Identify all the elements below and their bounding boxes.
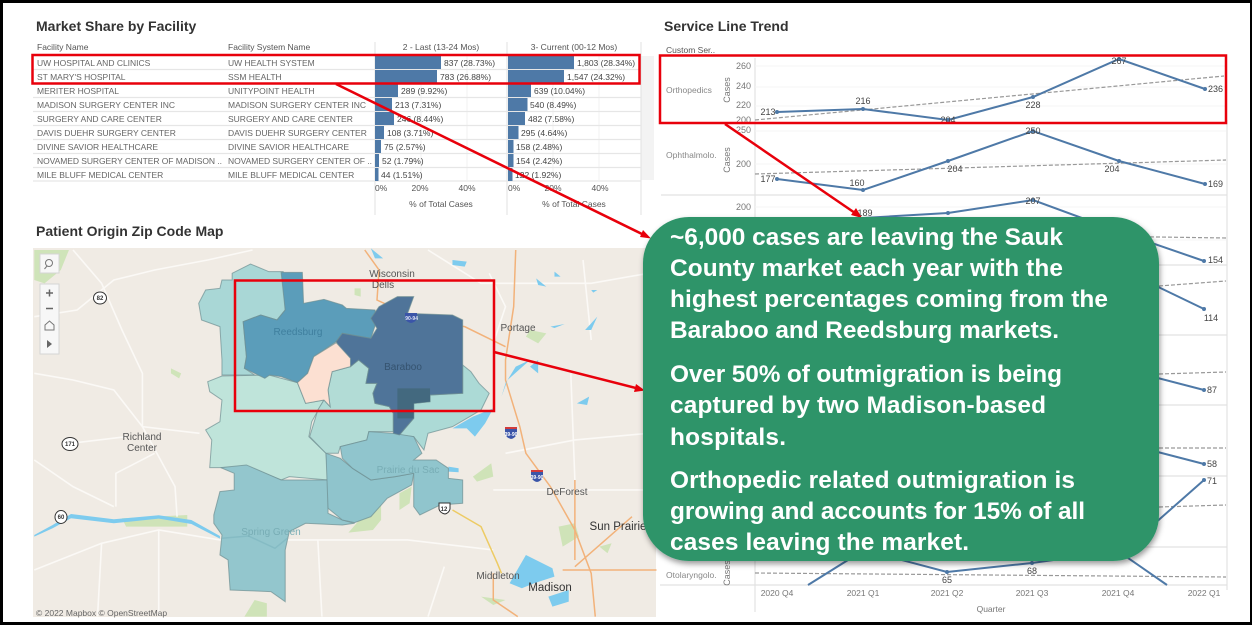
data labels: 58 <box>1207 459 1217 469</box>
icons: highway shields: 171 <box>65 442 76 448</box>
map labels: Portage <box>500 323 536 334</box>
row labels: Orthopedics <box>666 85 712 95</box>
data labels: 204 <box>947 164 963 174</box>
data points <box>775 57 1207 574</box>
y axes: 200 <box>736 115 751 125</box>
data labels: 71 <box>1207 476 1217 486</box>
data labels: 154 <box>1208 255 1223 265</box>
bar chart: current period: 295 (4.64%) <box>521 128 567 138</box>
facility names: ST MARY'S HOSPITAL <box>37 72 126 82</box>
heading: service line trend: Service Line Trend <box>664 18 788 34</box>
x axis: 2022 Q1 <box>1188 588 1221 598</box>
bar chart: last period: 52 (1.79%) <box>382 156 424 166</box>
icons: highway shields <box>55 292 544 524</box>
data labels: 250 <box>1025 126 1041 136</box>
facility systems: MADISON SURGERY CENTER INC <box>228 100 366 110</box>
facility names: DAVIS DUEHR SURGERY CENTER <box>37 128 176 138</box>
bar chart: current period: 1,547 (24.32%) <box>567 72 625 82</box>
callout text: second finding <box>670 361 1062 451</box>
callout text: first finding: ~6,000 cases are leaving the Sauk <box>670 224 1063 251</box>
axis labels <box>375 183 609 209</box>
data labels: 114 <box>1204 313 1218 323</box>
axis labels: 20% <box>411 183 429 193</box>
callout text: second finding: Over 50% of outmigration is being <box>670 361 1062 388</box>
data labels: 204 <box>1104 164 1120 174</box>
map labels: Sun Prairie <box>590 521 646 533</box>
facility names: MADISON SURGERY CENTER INC <box>37 100 175 110</box>
y axes: 250 <box>736 125 751 135</box>
facility systems: NOVAMED SURGERY CENTER OF .. <box>228 156 372 166</box>
map labels: DeForest <box>546 487 588 498</box>
arrow: facilities to callout <box>336 84 651 238</box>
panel: market share table <box>33 42 654 215</box>
map labels: Richland <box>123 432 161 443</box>
highlight: orthopedics trend <box>660 56 1226 123</box>
bar chart: last period: 213 (7.31%) <box>395 100 441 110</box>
heading: map: Patient Origin Zip Code Map <box>36 223 223 239</box>
column headers: Facility Name <box>37 42 89 52</box>
column headers <box>37 42 617 52</box>
bar chart: last period: 75 (2.57%) <box>384 142 426 152</box>
row labels: Otolaryngolo. <box>666 570 717 580</box>
bar chart: current period: 482 (7.58%) <box>528 114 574 124</box>
x axis: 2021 Q2 <box>931 588 964 598</box>
facility systems <box>228 58 372 180</box>
x axis: 2021 Q1 <box>847 588 880 598</box>
y axes: Cases <box>722 560 732 586</box>
data labels: 213 <box>760 107 776 117</box>
bar chart: last period: 108 (3.71%) <box>387 128 433 138</box>
panel: zip code map <box>33 248 656 618</box>
icons: highway shields: 12 <box>441 507 448 513</box>
facility names: SURGERY AND CARE CENTER <box>37 114 162 124</box>
highlight: Baraboo and Reedsburg <box>235 280 494 411</box>
bar chart: current period: 122 (1.92%) <box>515 170 561 180</box>
bar chart: current period: 154 (2.42%) <box>516 156 562 166</box>
callout text: first finding: highest percentages coming from the <box>670 286 1108 313</box>
map labels: Madison <box>528 582 572 594</box>
data labels: 169 <box>1208 179 1223 189</box>
row labels: Custom Ser.. <box>666 45 715 55</box>
bar chart: last period: 837 (28.73%) <box>444 58 495 68</box>
bar chart: current period: 540 (8.49%) <box>530 100 576 110</box>
line series <box>777 59 1205 585</box>
bar chart: last period: 44 (1.51%) <box>381 170 423 180</box>
facility names: DIVINE SAVIOR HEALTHCARE <box>37 142 158 152</box>
highlight: top two facilities <box>32 55 640 84</box>
bar chart: last period: 246 (8.44%) <box>397 114 443 124</box>
data labels: 207 <box>1025 196 1041 206</box>
x axis: 2021 Q4 <box>1102 588 1135 598</box>
map attribution: © 2022 Mapbox © OpenStreetMap <box>36 608 167 618</box>
icons: highway shields: 90-94 <box>405 316 418 322</box>
map labels: Middleton <box>476 571 520 582</box>
map controls <box>40 254 59 354</box>
callout text: second finding: hospitals. <box>670 424 786 451</box>
callout text: second finding: captured by two Madison-based <box>670 392 1046 419</box>
map labels: Prairie du Sac <box>377 465 439 476</box>
map labels <box>123 269 646 594</box>
heading: market share: Market Share by Facility <box>36 18 197 34</box>
data labels: 65 <box>942 575 952 585</box>
map labels: Center <box>127 443 158 454</box>
icons: highway shields: 60 <box>58 515 65 521</box>
x axis <box>761 588 1221 614</box>
icons: highway shields: 39-90 <box>531 475 544 481</box>
facility names: NOVAMED SURGERY CENTER OF MADISON .. <box>37 156 222 166</box>
callout text: first finding: Baraboo and Reedsburg markets. <box>670 317 1059 344</box>
map labels: Dells <box>372 280 394 291</box>
axis labels: % of Total Cases <box>409 199 473 209</box>
callout text: third finding: cases leaving the market. <box>670 529 969 556</box>
row labels <box>666 45 717 580</box>
facility systems: MILE BLUFF MEDICAL CENTER <box>228 170 354 180</box>
data labels: 189 <box>857 208 873 218</box>
map base: roads, water and parks <box>34 248 656 617</box>
data labels: 160 <box>849 178 865 188</box>
callout text: first finding: County market each year with the <box>670 255 1063 282</box>
map labels: Baraboo <box>384 362 422 373</box>
bar chart: last period: 289 (9.92%) <box>401 86 447 96</box>
facility systems: DIVINE SAVIOR HEALTHCARE <box>228 142 349 152</box>
map labels: Wisconsin <box>369 269 415 280</box>
arrow: orthopedics to callout <box>725 124 862 218</box>
y axes <box>722 61 751 586</box>
x axis: 2021 Q3 <box>1016 588 1049 598</box>
axis labels: 40% <box>458 183 476 193</box>
column headers: 2 - Last (13-24 Mos) <box>403 42 479 52</box>
y axes: 240 <box>736 81 751 91</box>
column headers: 3- Current (00-12 Mos) <box>531 42 617 52</box>
facility names: UW HOSPITAL AND CLINICS <box>37 58 151 68</box>
arrow: map to callout <box>494 352 645 392</box>
map labels: Spring Green <box>241 527 301 538</box>
data labels: 68 <box>1027 566 1037 576</box>
axis labels: % of Total Cases <box>542 199 606 209</box>
y axes: 220 <box>736 100 751 110</box>
bar chart: current period <box>508 56 635 181</box>
data labels: 216 <box>855 96 871 106</box>
icons: highway shields: 82 <box>97 296 104 302</box>
data labels: 204 <box>940 115 956 125</box>
facility systems: DAVIS DUEHR SURGERY CENTER <box>228 128 367 138</box>
facility systems: UW HEALTH SYSTEM <box>228 58 315 68</box>
data labels: 267 <box>1111 56 1127 66</box>
facility names: MILE BLUFF MEDICAL CENTER <box>37 170 163 180</box>
facility names: MERITER HOSPITAL <box>37 86 119 96</box>
data labels: 228 <box>1025 100 1041 110</box>
axis labels: 20% <box>544 183 562 193</box>
column headers: Facility System Name <box>228 42 310 52</box>
bar chart: last period: 783 (26.88%) <box>440 72 491 82</box>
bar chart: current period: 1,803 (28.34%) <box>577 58 635 68</box>
facility systems: SURGERY AND CARE CENTER <box>228 114 353 124</box>
callout: key findings <box>643 217 1159 561</box>
data labels: 177 <box>760 174 776 184</box>
callout text: third finding <box>670 467 1085 556</box>
data labels <box>760 56 1223 585</box>
facility systems: UNITYPOINT HEALTH <box>228 86 315 96</box>
map labels: Reedsburg <box>274 327 322 338</box>
bar chart: current period: 158 (2.48%) <box>516 142 562 152</box>
callout text: third finding: growing and accounts for 15% of all <box>670 498 1085 525</box>
trend lines <box>755 76 1226 577</box>
y axes: 260 <box>736 61 751 71</box>
x axis: 2020 Q4 <box>761 588 794 598</box>
data labels: 236 <box>1208 84 1223 94</box>
y axes: 200 <box>736 202 751 212</box>
panel: service line trend chart <box>660 45 1227 614</box>
bar chart: last period <box>375 56 495 181</box>
icons: highway shields: 39-90 <box>505 432 518 438</box>
y axes: 200 <box>736 159 751 169</box>
bar chart: current period: 639 (10.04%) <box>534 86 585 96</box>
axis labels: 0% <box>508 183 521 193</box>
y axes: Cases <box>722 77 732 103</box>
callout text: third finding: Orthopedic related outmigration is <box>670 467 1075 494</box>
facility systems: SSM HEALTH <box>228 72 282 82</box>
row labels: Ophthalmolo. <box>666 150 717 160</box>
callout text: first finding <box>670 224 1108 344</box>
x axis: Quarter <box>977 604 1006 614</box>
facility names <box>37 58 222 180</box>
data labels: 87 <box>1207 385 1217 395</box>
axis labels: 0% <box>375 183 388 193</box>
map regions: zip codes <box>199 264 489 602</box>
y axes: Cases <box>722 147 732 173</box>
axis labels: 40% <box>591 183 609 193</box>
